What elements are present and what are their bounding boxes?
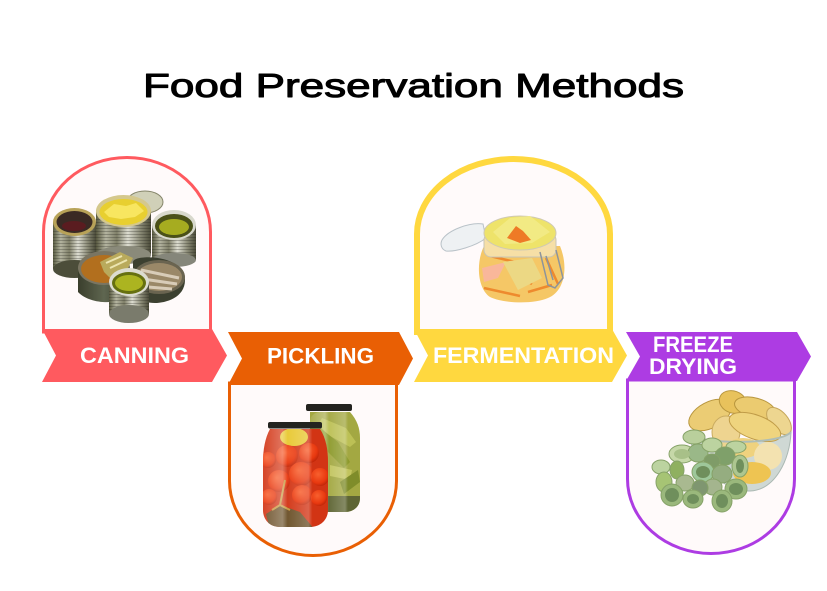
ribbon: canning: CANNING [80,343,189,368]
panel: pickling [228,332,413,556]
pickling shield frame [230,383,396,556]
panel: fermentation [414,159,627,382]
icon: fermentation jar [441,216,564,302]
ribbon: fermentation [414,329,627,382]
fermentation arch frame [417,159,610,332]
panel: canning [42,158,227,382]
ribbon: pickling: PICKLING [267,344,374,368]
panel: freeze drying [626,332,811,554]
ribbon: fermentation: FERMENTATION [433,343,614,368]
kiwi slices [652,430,748,512]
ribbon: pickling [228,332,413,385]
infographic [42,72,811,557]
freeze drying shield frame [628,380,794,554]
ribbon: canning [42,329,227,382]
icon: pickle jars [260,404,362,530]
ribbon: freeze drying: DRYING [649,354,737,379]
kiwi slice centres [665,449,744,508]
ribbon: freeze drying: FREEZE [653,332,733,357]
canning arch frame [44,158,210,332]
title: Food Preservation Methods [143,67,684,104]
ribbon: freeze drying [626,332,811,381]
icon: dried fruit bowl [652,387,796,512]
icon: open tin cans [53,191,196,323]
